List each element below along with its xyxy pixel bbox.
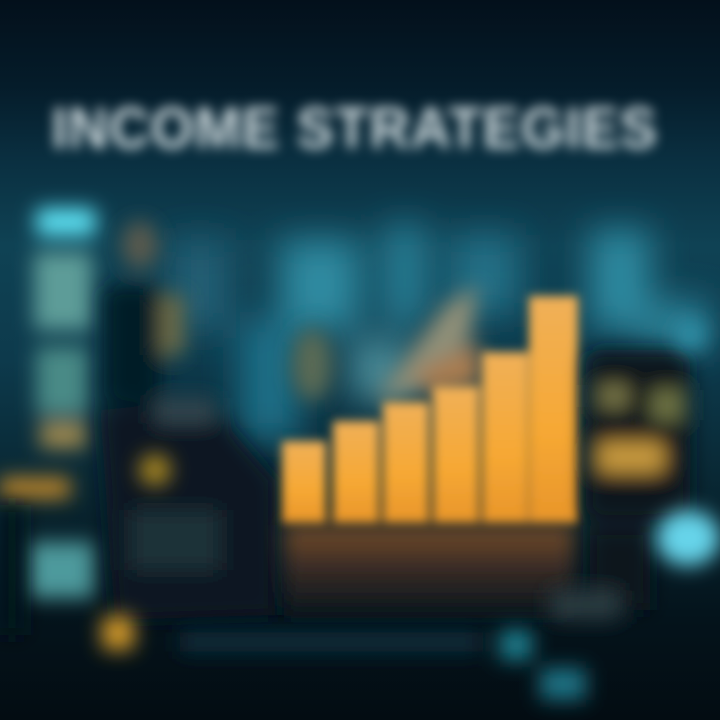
left column: data panels (0, 208, 96, 598)
title: INCOME STRATEGIES (52, 96, 658, 161)
bar chart: rising orange bars (282, 296, 578, 523)
arrow: rising trend behind bars (375, 285, 480, 400)
figures: dark silhouettes in foreground (0, 221, 332, 635)
icon: cyan glowing blobs (180, 319, 720, 700)
panel: dark device on right (550, 350, 690, 620)
icon: small gold accents (102, 454, 171, 650)
skyline: teal glow behind the scene (170, 225, 710, 440)
bar chart: reflection under bars (284, 525, 574, 615)
